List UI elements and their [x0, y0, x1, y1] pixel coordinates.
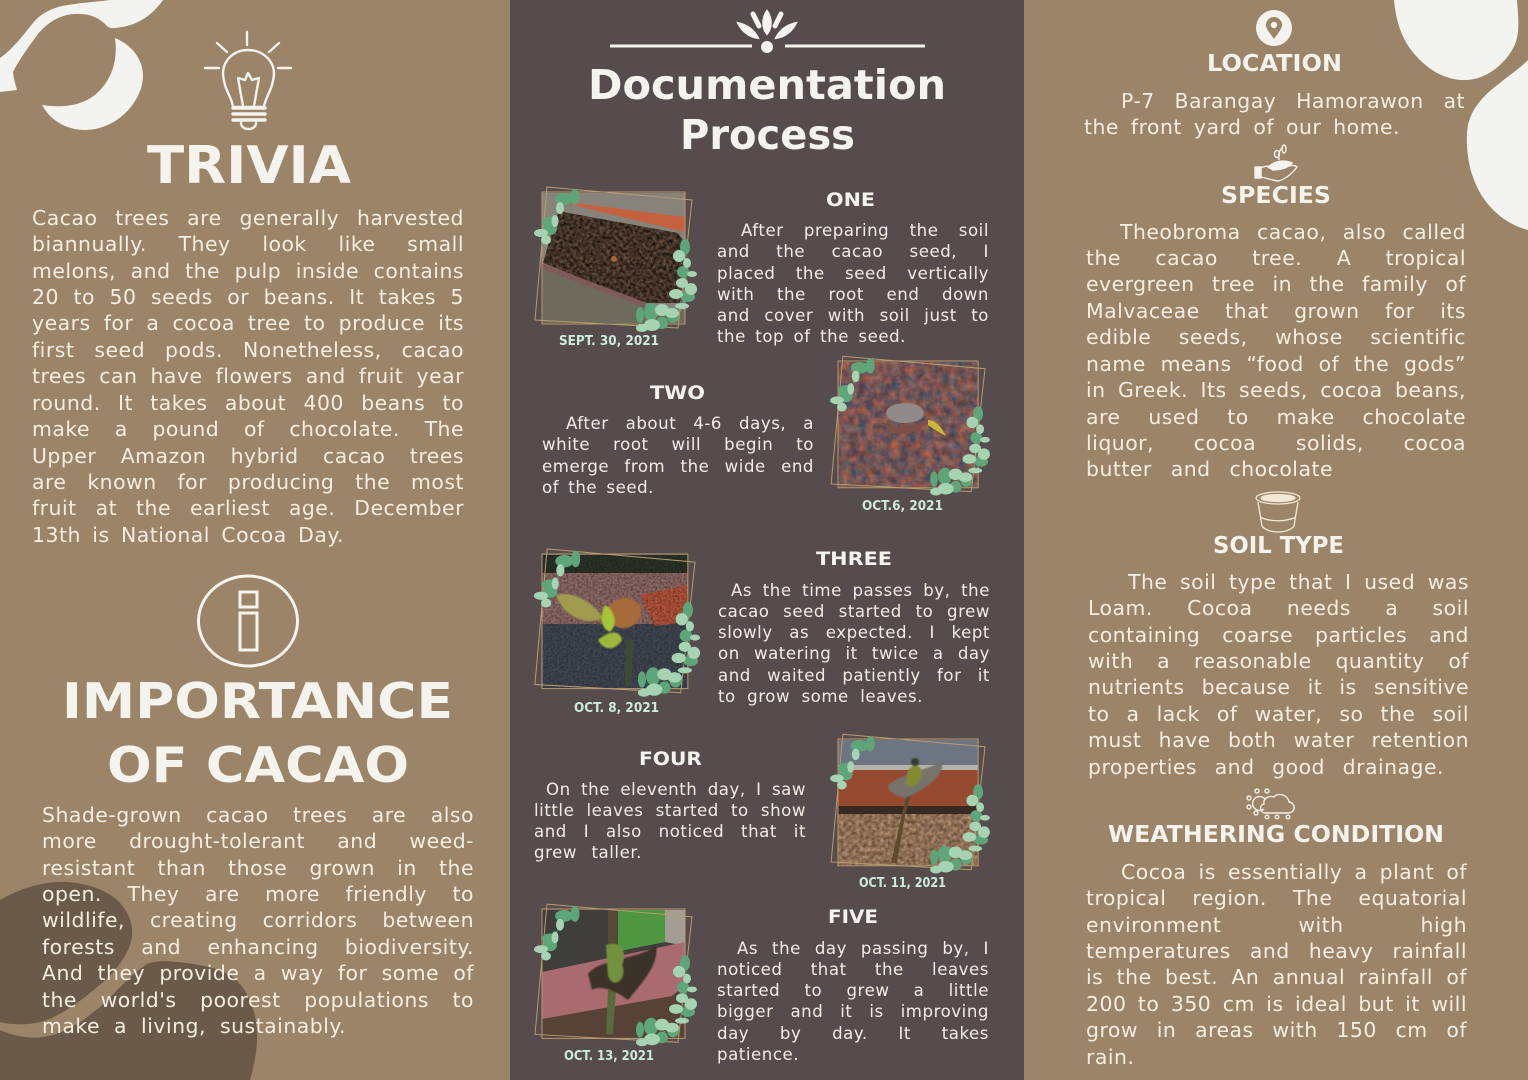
text block: trivia: 13th is National Cocoa Day. — [32, 523, 344, 547]
text block: soil type: nutrients because it is sensitive — [1088, 675, 1469, 699]
icon: light bulb — [205, 32, 291, 129]
photo: sprouting seed, step two — [830, 356, 990, 495]
text block: importance of cacao: the world's poorest populations to — [42, 988, 474, 1012]
text block: trivia: first seed pods. Nonetheless, cacao — [32, 338, 464, 362]
text block: step three — [718, 581, 990, 706]
text block: weathering condition: tropical region. The equatorial — [1086, 886, 1467, 910]
panel: location, species, soil type, weathering condition — [1024, 0, 1528, 1080]
decorative cream blobs top-right — [1394, 0, 1528, 230]
text block: step two: After about 4-6 days, a — [566, 414, 814, 433]
text block: importance of cacao: make a living, sustainably. — [42, 1014, 346, 1038]
heading: weathering condition: WEATHERING CONDITION — [1108, 822, 1444, 848]
text block: step two: emerge from the wide end — [542, 457, 814, 476]
text block: trivia: trees can have flowers and fruit year — [32, 364, 464, 388]
text block: step five: day by day. It takes — [717, 1024, 989, 1043]
heading: importance of cacao: OF CACAO — [107, 737, 409, 794]
text block: step five: started to grew a little — [717, 981, 989, 1000]
text block: importance of cacao: wildlife, creating corridors between — [42, 908, 474, 932]
text block: trivia: 20 to 50 seeds or beans. It takes 5 — [32, 285, 464, 309]
step one heading: ONE — [826, 189, 875, 211]
text block: step five: bigger and it is improving — [717, 1002, 989, 1021]
text block: importance of cacao: forests and enhancing biodiversity. — [42, 935, 474, 959]
text block: weathering condition: rain. — [1086, 1045, 1134, 1069]
text block: trivia: round. It takes about 400 beans to — [32, 391, 464, 415]
text block: soil type: with a reasonable quantity of — [1088, 649, 1469, 673]
text block: step one: and the cacao seed, I — [717, 242, 989, 261]
icon: plant pot — [1256, 492, 1300, 532]
text block: step four: and I also noticed that it — [534, 822, 806, 841]
text block: soil type — [1088, 570, 1469, 779]
heading: location: LOCATION — [1207, 51, 1342, 77]
icon: hand holding sprout — [1255, 145, 1297, 181]
text block: trivia: make a pound of chocolate. The — [32, 417, 464, 441]
text block: weathering condition: is the best. An annual rainfall of — [1086, 965, 1467, 989]
text block: step five — [717, 939, 989, 1064]
text block: trivia — [32, 206, 464, 547]
text block: trivia: years for a cocoa tree to produce its — [32, 311, 464, 335]
text block: step five: patience. — [717, 1045, 799, 1064]
text block: species: Malvaceae that grown for its — [1086, 299, 1466, 323]
text block: soil type: containing coarse particles and — [1088, 623, 1469, 647]
text block: step three: to grow some leaves. — [718, 687, 923, 706]
text block: weathering condition: environment with high — [1086, 913, 1467, 937]
heading: documentation process — [588, 61, 946, 159]
text block: step three: on watering it twice a day — [718, 644, 990, 663]
date label: oct. 13, 2021: OCT. 13, 2021 — [564, 1049, 654, 1064]
panel: trivia and importance of cacao — [0, 0, 510, 1080]
text block: location: the front yard of our home. — [1084, 115, 1400, 139]
date label: sept. 30, 2021: SEPT. 30, 2021 — [559, 334, 659, 349]
text block: species: are used to make chocolate — [1086, 405, 1466, 429]
decorative cream blob top-left — [0, 0, 163, 130]
text block: weathering condition: Cocoa is essentially a plant of — [1121, 860, 1467, 884]
photo: leafing seedling, step five — [534, 904, 697, 1046]
text block: soil type: properties and good drainage. — [1088, 755, 1444, 779]
heading: importance of cacao — [62, 673, 453, 794]
text block: step three: As the time passes by, the — [731, 581, 990, 600]
text block: weathering condition: 200 to 350 cm is ideal but it will — [1086, 992, 1467, 1016]
text block: step one: After preparing the soil — [741, 221, 989, 240]
text block: step one: and cover with soil just to — [717, 306, 989, 325]
decorative dark blobs bottom-left — [0, 882, 257, 1080]
panel: documentation process — [510, 0, 1024, 1080]
text block: step four: On the eleventh day, I saw — [546, 780, 806, 799]
text block: importance of cacao: more drought-tolerant and weed- — [42, 829, 474, 853]
text block: step two: white root will begin to — [542, 435, 814, 454]
heading: documentation process: Documentation — [588, 61, 946, 109]
icon: burst with divider lines — [610, 11, 925, 53]
text block: soil type: to a lack of water, so the soil — [1088, 702, 1469, 726]
photo: soil in planter, step one — [534, 187, 697, 332]
text block: step one: placed the seed vertically — [717, 264, 989, 283]
text block: step three: cacao seed started to grew — [718, 602, 990, 621]
text block: importance of cacao: open. They are more friendly to — [42, 882, 474, 906]
text block: species: the cacao tree. A tropical — [1086, 246, 1466, 270]
step four heading: FOUR — [639, 748, 702, 770]
text block: trivia: are known for producing the most — [32, 470, 464, 494]
text block: step five: noticed that the leaves — [717, 960, 989, 979]
text block: step two: of the seed. — [542, 478, 654, 497]
text block: importance of cacao — [42, 803, 474, 1038]
text block: location: P-7 Barangay Hamorawon at — [1121, 89, 1465, 113]
text block: species: Theobroma cacao, also called — [1120, 220, 1466, 244]
step five heading: FIVE — [828, 906, 878, 928]
step two heading: TWO — [650, 382, 705, 404]
icon: information circle — [198, 576, 298, 666]
date label: oct. 8, 2021: OCT. 8, 2021 — [574, 701, 659, 716]
text block: step four: grew taller. — [534, 843, 642, 862]
heading: species: SPECIES — [1221, 183, 1331, 209]
text block: importance of cacao: resistant than those grown in the — [42, 856, 474, 880]
text block: soil type: The soil type that I used was — [1128, 570, 1469, 594]
text block: trivia: Upper Amazon hybrid cacao trees — [32, 444, 464, 468]
text block: species: evergreen tree in the family of — [1086, 272, 1466, 296]
text block: step two — [542, 414, 814, 497]
text block: weathering condition — [1086, 860, 1467, 1069]
text block: trivia: melons, and the pulp inside contains — [32, 259, 464, 283]
text block: species — [1086, 220, 1466, 481]
date label: oct. 6, 2021: OCT.6, 2021 — [862, 499, 943, 514]
text block: importance of cacao: And they provide a way for some of — [42, 961, 474, 985]
text block: species: in Greek. Its seeds, cocoa beans, — [1086, 378, 1466, 402]
text block: step three: and waited patiently for it — [718, 666, 990, 685]
text block: soil type: Loam. Cocoa needs a soil — [1088, 596, 1469, 620]
date label: oct. 11, 2021: OCT. 11, 2021 — [859, 876, 946, 891]
text block: location — [1084, 89, 1465, 139]
photo: young seedling, step four — [830, 734, 990, 873]
heading: soil type: SOIL TYPE — [1213, 533, 1344, 559]
heading: documentation process: Process — [680, 111, 855, 159]
heading: importance of cacao: IMPORTANCE — [62, 673, 453, 730]
text block: step three: slowly as expected. I kept — [718, 623, 990, 642]
text block: trivia: biannually. They look like small — [32, 232, 464, 256]
text block: step five: As the day passing by, I — [737, 939, 989, 958]
text block: soil type: must have both water retention — [1088, 728, 1469, 752]
text block: step one: the top of the seed. — [717, 327, 906, 346]
text block: species: liquor, cocoa solids, cocoa — [1086, 431, 1466, 455]
text block: trivia: Cacao trees are generally harvested — [32, 206, 464, 230]
text block: weathering condition: temperatures and heavy rainfall — [1086, 939, 1467, 963]
text block: species: name means “food of the gods” — [1086, 352, 1466, 376]
text block: step one — [717, 221, 989, 346]
icon: sun, cloud and rain — [1247, 789, 1294, 819]
step three heading: THREE — [816, 548, 892, 570]
text block: trivia: fruit at the earliest age. December — [32, 496, 464, 520]
text block: species: edible seeds, whose scientific — [1086, 325, 1466, 349]
icon: location pin — [1256, 10, 1292, 46]
text block: species: butter and chocolate — [1086, 457, 1333, 481]
text block: step four — [534, 780, 806, 862]
photo: first bud, step three — [534, 549, 700, 697]
heading: trivia: TRIVIA — [147, 136, 351, 196]
text block: weathering condition: grow in areas with 150 cm of — [1086, 1018, 1467, 1042]
text block: step one: with the root end down — [717, 285, 989, 304]
text block: importance of cacao: Shade-grown cacao trees are also — [42, 803, 474, 827]
text block: step four: little leaves started to show — [534, 801, 806, 820]
